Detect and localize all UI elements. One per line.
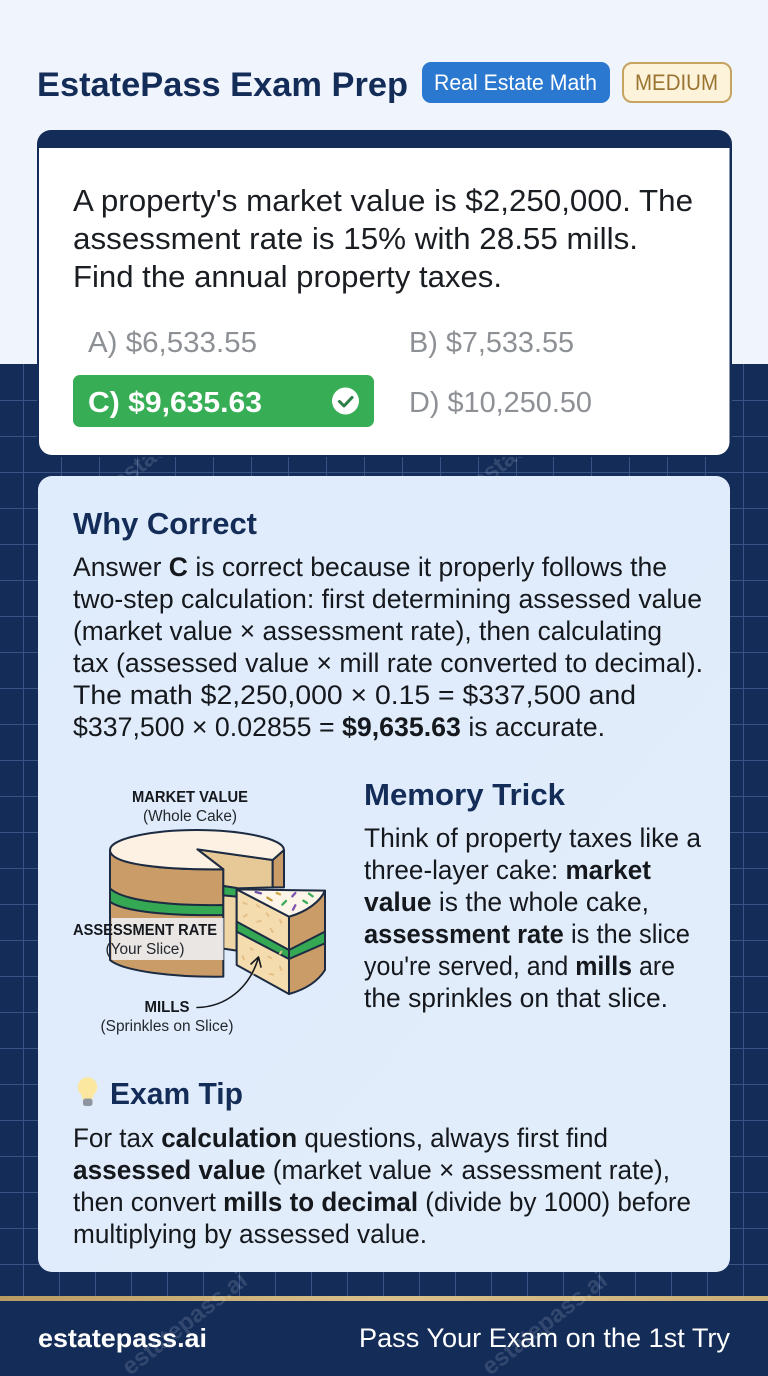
text: exam tip body: multiplying by assessed value. — [73, 1219, 427, 1249]
arrow: mills pointer — [197, 957, 261, 1008]
badge: real estate math: Real Estate Math — [434, 70, 597, 95]
panel: question — [37, 130, 732, 457]
question text: Find the annual property taxes. — [73, 259, 502, 294]
question text — [73, 183, 693, 294]
text: why correct body: two-step calculation: first determining assessed value — [73, 584, 702, 614]
option B: B) $7,533.55 — [409, 327, 574, 359]
option C correct — [73, 375, 374, 427]
option A: A) $6,533.55 — [88, 327, 257, 359]
text: why correct body: tax (assessed value × mill rate converted to decimal). — [73, 648, 703, 678]
text: why correct body: (market value × assessment rate), then calculating — [73, 616, 662, 646]
question text: A property's market value is $2,250,000. The — [73, 183, 693, 218]
text: memory trick body: you're served, and mills are — [364, 951, 675, 981]
watermarks: estatepass.ai — [107, 381, 242, 495]
text: exam tip body: assessed value (market value × assessment rate), — [73, 1155, 670, 1185]
text: memory trick body: three-layer cake: market — [364, 855, 651, 885]
option D: D) $10,250.50 — [409, 387, 592, 419]
cake labels: ASSESSMENT RATE — [73, 922, 217, 939]
panel: explanation — [38, 476, 730, 1272]
cake labels: (Sprinkles on Slice) — [100, 1018, 234, 1035]
text: why correct body — [73, 552, 703, 742]
cake labels: (Your Slice) — [106, 941, 184, 958]
text: memory trick body — [364, 823, 702, 1013]
option C correct: C) $9,635.63 — [88, 387, 262, 419]
watermarks: estatepass.ai — [467, 381, 602, 495]
brand: estatepass.ai — [38, 1323, 207, 1353]
illustration: layered cake — [73, 789, 325, 1035]
cake labels: (Whole Cake) — [143, 808, 237, 825]
heading: why correct: Why Correct — [73, 506, 257, 541]
label backdrop — [112, 918, 224, 960]
text: memory trick body: the sprinkles on that slice. — [364, 983, 668, 1013]
text: exam tip body: then convert mills to decimal (divide by 1000) before — [73, 1187, 691, 1217]
cake labels: MARKET VALUE — [132, 789, 248, 806]
heading: exam tip: Exam Tip — [110, 1076, 243, 1111]
text: exam tip body — [73, 1123, 691, 1249]
cake labels: MILLS — [144, 999, 190, 1016]
text: memory trick body: Think of property taxes like a — [364, 823, 702, 853]
text: exam tip body: For tax calculation questions, always first find — [73, 1123, 608, 1153]
badge: real estate math — [422, 62, 610, 103]
icon: light bulb — [78, 1077, 97, 1106]
tagline: Pass Your Exam on the 1st Try — [359, 1323, 730, 1353]
text: memory trick body: value is the whole cake, — [364, 887, 649, 917]
text: why correct body: Answer C is correct because it properly follows the — [73, 552, 667, 582]
footer — [0, 1267, 768, 1376]
watermarks — [107, 381, 602, 495]
text: why correct body: $337,500 × 0.02855 = $9,635.63 is accurate. — [73, 712, 605, 742]
badge: medium: MEDIUM — [635, 70, 718, 95]
text: why correct body: The math $2,250,000 × 0.15 = $337,500 and — [73, 680, 636, 710]
question text: assessment rate is 15% with 28.55 mills. — [73, 221, 638, 256]
text: memory trick body: assessment rate is the slice — [364, 919, 690, 949]
badge: medium — [623, 63, 731, 102]
footer watermarks — [117, 1267, 612, 1376]
cake labels — [73, 789, 248, 1035]
title: EstatePass Exam Prep — [37, 66, 408, 104]
heading: memory trick: Memory Trick — [364, 777, 566, 812]
